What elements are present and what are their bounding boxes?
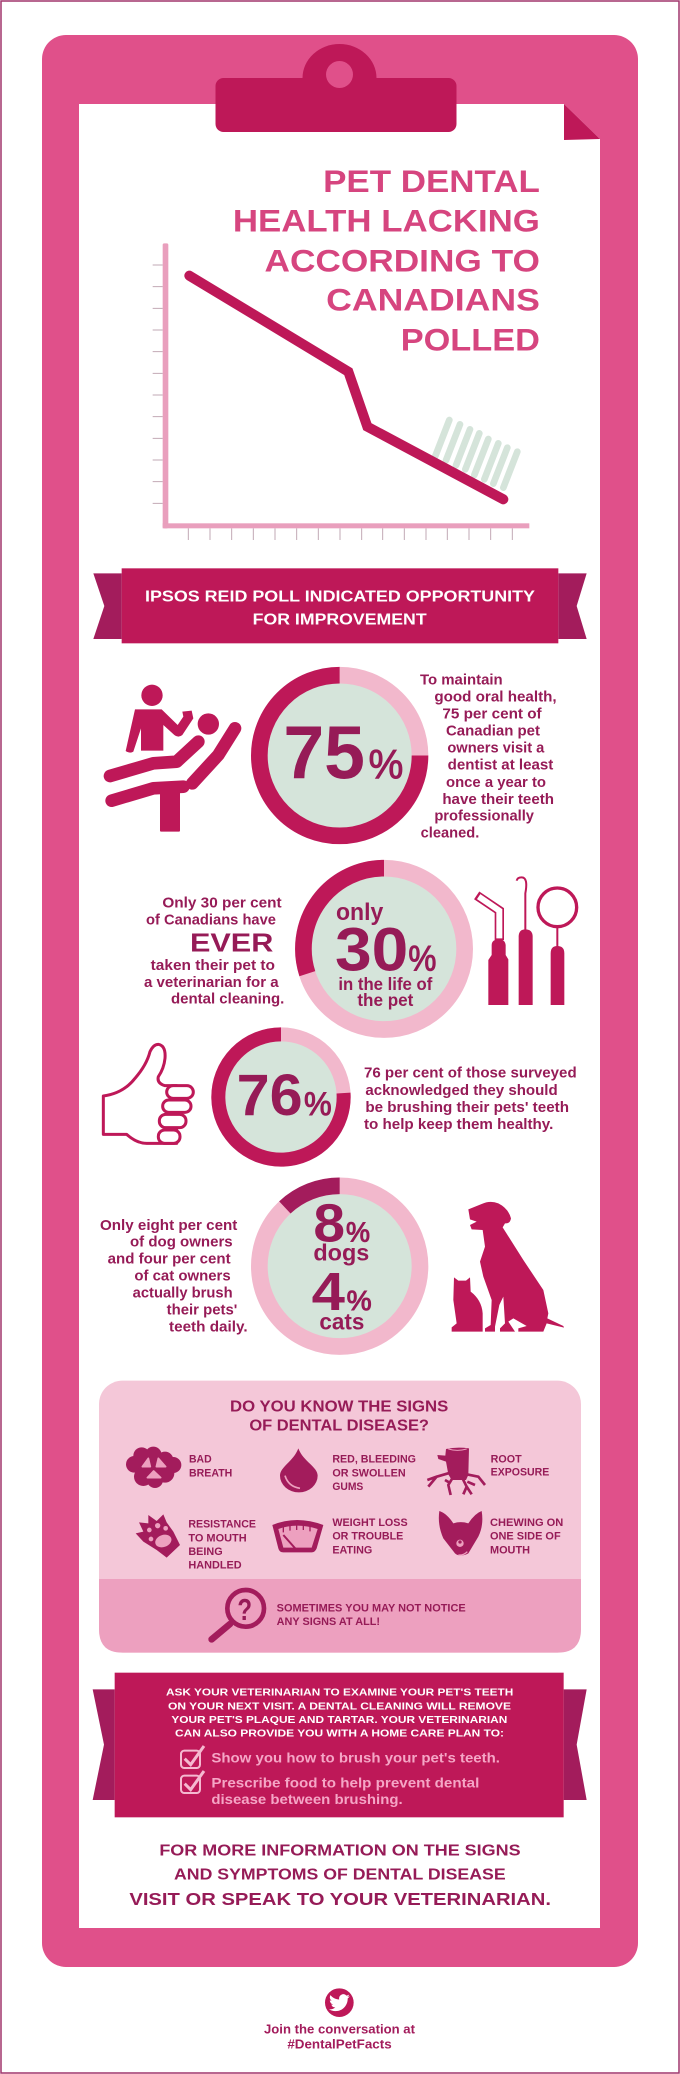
text: 30 per cent description: of Canadians have: [146, 912, 276, 928]
label: root exposure: ROOT: [491, 1453, 522, 1465]
ribbon: Ipsos Reid heading: [93, 568, 587, 643]
text: 75 per cent description: [420, 672, 557, 841]
donut: 76 percent: [218, 1034, 344, 1160]
clip: [216, 44, 456, 132]
donut: 76 percent: 76: [237, 1063, 303, 1128]
text: 76 per cent description: to help keep them healthy.: [364, 1117, 553, 1133]
donut: 8 percent dogs, 4 percent cats: %: [347, 1285, 372, 1316]
donut: 76 percent: %: [304, 1086, 332, 1122]
donut: 75 percent: %: [369, 741, 403, 787]
panel heading: OF DENTAL DISEASE?: [249, 1418, 429, 1435]
donut: 8 percent dogs, 4 percent cats: cats: [319, 1308, 364, 1334]
text: 76 per cent description: [364, 1066, 577, 1133]
icon: bad breath cloud: [126, 1447, 181, 1488]
donut: 8 percent dogs, 4 percent cats: %: [346, 1217, 370, 1248]
label: resistance to handling: TO MOUTH: [188, 1532, 247, 1544]
text: 75 per cent description: owners visit a: [447, 741, 545, 757]
footer text: #DentalPetFacts: [287, 2037, 392, 2051]
call to action text: VISIT OR SPEAK TO YOUR VETERINARIAN.: [129, 1889, 551, 1909]
donut: 30 percent: %: [408, 940, 436, 979]
label: no signs note: [277, 1602, 466, 1628]
row: 76 per cent should brush: [103, 1034, 577, 1160]
checklist item 2: [211, 1774, 479, 1807]
call to action text: [129, 1843, 551, 1909]
donut: 8 percent dogs, 4 percent cats: 4: [312, 1263, 345, 1322]
donut: 30 percent: in the life of: [338, 974, 433, 994]
icon: magnifying glass with question mark: [212, 1590, 264, 1639]
donut: 30 percent: [303, 868, 465, 1029]
text: 76 per cent description: acknowledged they should: [365, 1083, 558, 1099]
donut: 30 percent: 30: [335, 916, 408, 985]
text: dogs and cats description: of dog owners: [130, 1235, 233, 1251]
donut: 8 percent dogs, 4 percent cats: dogs: [313, 1240, 369, 1266]
title: POLLED: [401, 323, 540, 358]
text: 75 per cent description: dentist at least: [448, 758, 554, 774]
text: 30 per cent description: dental cleaning.: [171, 992, 284, 1008]
label: weight loss: OR TROUBLE: [332, 1531, 404, 1543]
donut: 30 percent: the pet: [357, 990, 414, 1010]
text: 75 per cent description: 75 per cent of: [442, 707, 542, 723]
donut: 75 percent: [259, 675, 420, 836]
title: HEALTH LACKING: [233, 204, 540, 239]
label: weight loss: EATING: [332, 1544, 372, 1556]
paper sheet: [79, 104, 600, 1928]
text: 75 per cent description: good oral health,: [434, 690, 557, 706]
donut: 8 percent dogs, 4 percent cats: [259, 1186, 420, 1346]
checklist item 1: Show you how to brush your pet's teeth.: [211, 1749, 500, 1765]
text: 30 per cent description: a veterinarian for a: [144, 975, 280, 991]
text: 76 per cent description: be brushing their pets' teeth: [365, 1100, 569, 1116]
icon: weighing scale: [272, 1520, 323, 1552]
footer: twitter hashtag: [264, 1988, 416, 2051]
call to action text: FOR MORE INFORMATION ON THE SIGNS: [159, 1843, 521, 1860]
icon: checkbox 2: [181, 1771, 204, 1793]
text: 30 per cent description: Only 30 per cent: [162, 896, 282, 912]
icon: checkbox 1: [181, 1746, 204, 1768]
donut: 8 percent dogs, 4 percent cats: 8: [313, 1195, 345, 1254]
ribbon: Ipsos Reid heading: IPSOS REID POLL INDICATED OPPORTUNITY: [145, 589, 535, 606]
title: PET DENTAL: [323, 164, 540, 199]
icon: paw: [136, 1514, 180, 1558]
ribbon: Ipsos Reid heading: FOR IMPROVEMENT: [253, 611, 427, 628]
icon: magnifying glass with question mark: ?: [237, 1593, 252, 1627]
footer text: Join the conversation at: [264, 2022, 416, 2036]
call to action text: AND SYMPTOMS OF DENTAL DISEASE: [174, 1867, 506, 1884]
label: weight loss: WEIGHT LOSS: [332, 1517, 408, 1529]
label: no signs note: SOMETIMES YOU MAY NOT NOTICE: [277, 1602, 466, 1614]
icon: thumbs up: [103, 1044, 193, 1143]
label: bleeding gums: OR SWOLLEN: [332, 1467, 406, 1479]
text: 75 per cent description: cleaned.: [421, 825, 479, 841]
label: resistance to handling: [188, 1519, 256, 1571]
ribbon paragraph: CAN ALSO PROVIDE YOU WITH A HOME CARE PLAN TO:: [175, 1729, 504, 1740]
text: dogs and cats description: of cat owners: [134, 1269, 231, 1285]
label: resistance to handling: RESISTANCE: [188, 1519, 256, 1531]
label: weight loss: [332, 1517, 408, 1556]
text: dogs and cats description: their pets': [167, 1302, 237, 1318]
text: dogs and cats description: Only eight per cent: [100, 1218, 238, 1234]
row: 30 per cent dental cleaning: [144, 868, 577, 1029]
panel heading: [230, 1399, 448, 1435]
checklist item 2: Prescribe food to help prevent dental: [211, 1774, 479, 1790]
label: root exposure: EXPOSURE: [491, 1467, 550, 1479]
text: dogs and cats description: and four per cent: [108, 1252, 231, 1268]
label: root exposure: [491, 1453, 550, 1479]
title: CANADIANS: [326, 283, 540, 318]
text: dogs and cats description: teeth daily.: [169, 1319, 248, 1335]
label: chewing on one side: [490, 1517, 563, 1556]
toothbrush bristles: [435, 420, 517, 488]
label: chewing on one side: CHEWING ON: [490, 1517, 563, 1529]
text: 75 per cent description: once a year to: [446, 775, 546, 791]
ribbon paragraph: ON YOUR NEXT VISIT. A DENTAL CLEANING WILL REMOVE: [168, 1701, 511, 1712]
text: 75 per cent description: Canadian pet: [446, 724, 540, 740]
label: no signs note: ANY SIGNS AT ALL!: [277, 1616, 380, 1628]
text: dogs and cats description: [100, 1218, 248, 1335]
label: resistance to handling: HANDLED: [188, 1559, 242, 1571]
panel footer band: [99, 1579, 581, 1653]
text: 30 per cent description: EVER: [190, 927, 274, 957]
panel: signs of dental disease: [99, 1381, 581, 1653]
chart: toothbrush line graph: [153, 243, 529, 540]
label: bleeding gums: GUMS: [332, 1481, 364, 1493]
text: 76 per cent description: 76 per cent of those surveyed: [364, 1066, 577, 1082]
label: bad breath: BREATH: [189, 1467, 232, 1479]
ribbon paragraph: YOUR PET'S PLAQUE AND TARTAR. YOUR VETERINARIAN: [171, 1715, 507, 1726]
checklist item 2: disease between brushing.: [211, 1791, 403, 1807]
text: 75 per cent description: To maintain: [420, 672, 503, 688]
icon: dentist and patient in chair: [110, 685, 235, 832]
icon: blood drop: [280, 1448, 318, 1492]
label: bad breath: [189, 1454, 232, 1479]
row: 75 per cent visit a dentist: [110, 672, 557, 841]
icon: twitter bird: [325, 1988, 354, 2017]
icon: dental tools: [477, 877, 577, 1005]
text: 30 per cent description: [144, 896, 284, 1008]
ribbon paragraph: ASK YOUR VETERINARIAN TO EXAMINE YOUR PET'S TEETH: [166, 1688, 513, 1699]
label: bleeding gums: RED, BLEEDING: [332, 1454, 416, 1466]
title: ACCORDING TO: [265, 244, 540, 279]
text: dogs and cats description: actually brush: [133, 1286, 233, 1302]
toothbrush handle line: [189, 276, 503, 499]
chart axes: [163, 243, 529, 528]
icon: dog face: [439, 1511, 482, 1555]
text: 30 per cent description: taken their pet to: [151, 958, 275, 974]
paper fold: [564, 104, 600, 140]
icon: dog and cat silhouettes: [452, 1202, 564, 1332]
panel heading: DO YOU KNOW THE SIGNS: [230, 1399, 448, 1416]
label: bleeding gums: [332, 1454, 416, 1493]
ribbon: ask your veterinarian: [93, 1673, 587, 1817]
text: 75 per cent description: have their teeth: [442, 792, 554, 808]
label: bad breath: BAD: [189, 1454, 212, 1466]
donut: 30 percent: only: [336, 899, 384, 926]
text: 75 per cent description: professionally: [434, 809, 534, 825]
label: chewing on one side: MOUTH: [490, 1544, 530, 1556]
label: chewing on one side: ONE SIDE OF: [490, 1531, 561, 1543]
panel background: [99, 1381, 581, 1653]
title: [233, 164, 540, 358]
footer text: [264, 2022, 416, 2051]
row: 8 per cent dogs and 4 per cent cats: [100, 1186, 564, 1346]
label: resistance to handling: BEING: [188, 1546, 223, 1558]
icon: tree stump roots: [427, 1448, 485, 1495]
ribbon paragraph: [166, 1688, 513, 1740]
donut: 75 percent: 75: [283, 710, 365, 794]
